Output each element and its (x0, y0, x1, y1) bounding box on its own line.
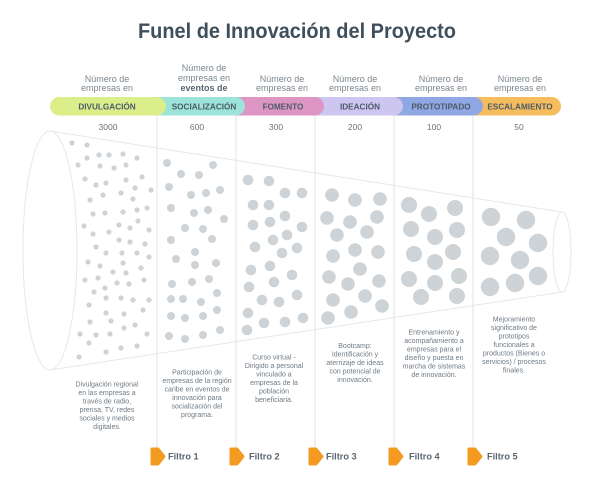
description: escalamiento: Mejoramiento (493, 316, 535, 324)
description: socialización: Participación de (172, 370, 222, 376)
description: ideación: innovación. (337, 377, 373, 384)
description: ideación: Identificación y (332, 352, 379, 358)
company counts: 200 (348, 122, 362, 132)
header: ideación: empresas en (329, 83, 381, 93)
header: socialización: Número de (182, 63, 226, 73)
pill labels: SOCIALIZACIÓN (172, 100, 236, 111)
dots: socialización (163, 159, 228, 343)
filter 2: Filtro 2 (249, 452, 280, 462)
icon: orange arrow (231, 449, 243, 464)
pill labels: ESCALAMIENTO (487, 102, 553, 111)
description: escalamiento: significativo de (491, 325, 537, 332)
pill: divulgación (50, 97, 166, 116)
description: prototipado: empresas para el (407, 346, 461, 354)
company counts: 3000 (99, 122, 118, 132)
company counts: 600 (190, 122, 204, 132)
dots: escalamiento (481, 208, 547, 296)
description: escalamiento: prototipos (499, 334, 530, 340)
filter 1 (152, 449, 199, 464)
stage pill bar (50, 97, 561, 116)
pill labels: PROTOTIPADO (411, 102, 471, 111)
pill: fomento (220, 97, 324, 116)
description: socialización: socialización del (172, 404, 223, 410)
description: fomento: Curso virtual - (252, 354, 296, 362)
description: socialización: empresas de la región (162, 378, 232, 385)
pill: socialización (140, 97, 245, 116)
description: divulgación: través de radio, (83, 398, 131, 406)
header: socialización: empresas en (178, 73, 230, 83)
filter 3 (310, 449, 357, 464)
dots: fomento (242, 175, 308, 335)
company counts: 50 (514, 122, 524, 132)
column headers (81, 63, 546, 93)
icon: orange arrow (310, 449, 322, 464)
header: fomento: empresas en (256, 83, 308, 93)
description: prototipado: acompañamiento a (404, 338, 464, 345)
description: divulgación: Divulgación regional (75, 382, 139, 388)
filter 5 (469, 449, 518, 464)
description: fomento: Dirigido a personal (245, 363, 304, 370)
description: divulgación: prensa, TV, redes (80, 407, 135, 414)
icon: orange arrow (469, 449, 481, 464)
filter 2 (231, 449, 280, 464)
title: Funel de Innovación del Proyecto (138, 20, 456, 43)
description: divulgación: en las empresas a (78, 390, 136, 397)
description: ideación: aterrizaje de ideas (326, 360, 384, 367)
dots: divulgación (69, 140, 154, 360)
description: divulgación: digitales. (93, 424, 121, 431)
header: prototipado: empresas en (415, 83, 467, 93)
pill: escalamiento (460, 97, 561, 116)
header: divulgación: Número de (85, 74, 129, 84)
filter 4 (390, 449, 441, 464)
company counts: 100 (427, 122, 441, 132)
description: prototipado: diseño y puesta en (405, 355, 463, 362)
description: socialización: programa. (181, 412, 213, 419)
header: divulgación: empresas en (81, 83, 133, 93)
description: fomento: población (259, 388, 289, 396)
pill labels: IDEACIÓN (340, 100, 380, 111)
description: escalamiento: funcionales a (493, 342, 535, 349)
description: ideación: con potencial de (330, 368, 381, 376)
description: fomento: vinculado a (256, 372, 292, 378)
filter 1: Filtro 1 (168, 452, 199, 462)
pill: ideación (300, 97, 403, 116)
description: ideación: Bootcamp: (338, 343, 372, 350)
pill labels: DIVULGACIÓN (78, 100, 136, 111)
header: escalamiento: Número de (498, 74, 542, 84)
stage dividers (157, 112, 473, 448)
header: escalamiento: empresas en (494, 83, 546, 93)
description: fomento: beneficiaria. (255, 397, 293, 404)
filter 5: Filtro 5 (487, 452, 518, 462)
description: escalamiento: servicios) / procesos (482, 359, 546, 366)
funnel outline (23, 131, 571, 370)
filter 4: Filtro 4 (409, 452, 441, 462)
description: divulgación: sociales y medios (79, 416, 135, 422)
header: ideación: Número de (333, 74, 377, 84)
pill: prototipado (380, 97, 483, 116)
description: escalamiento: productos (Bienes o (483, 350, 545, 358)
pill labels (78, 100, 553, 111)
description: socialización: innovación para (172, 395, 222, 402)
description: socialización: caribe en eventos de (164, 386, 230, 394)
header: socialización: eventos de (180, 83, 228, 93)
header: fomento: Número de (260, 74, 304, 84)
company counts: 300 (269, 122, 283, 132)
description: prototipado: Entrenamiento y (409, 330, 460, 336)
icon: orange arrow (152, 449, 164, 464)
pill labels: FOMENTO (263, 102, 304, 111)
description: fomento: empresas de la (250, 380, 298, 387)
company counts (99, 122, 524, 132)
dots: prototipado (401, 197, 467, 305)
header: prototipado: Número de (419, 74, 463, 84)
filter 3: Filtro 3 (326, 452, 357, 462)
icon: orange arrow (390, 449, 402, 464)
description: escalamiento: finales. (503, 368, 525, 374)
description: prototipado: marcha de sistemas (403, 364, 466, 370)
dots: ideación (320, 188, 389, 325)
description: prototipado: de innovación. (411, 372, 457, 379)
